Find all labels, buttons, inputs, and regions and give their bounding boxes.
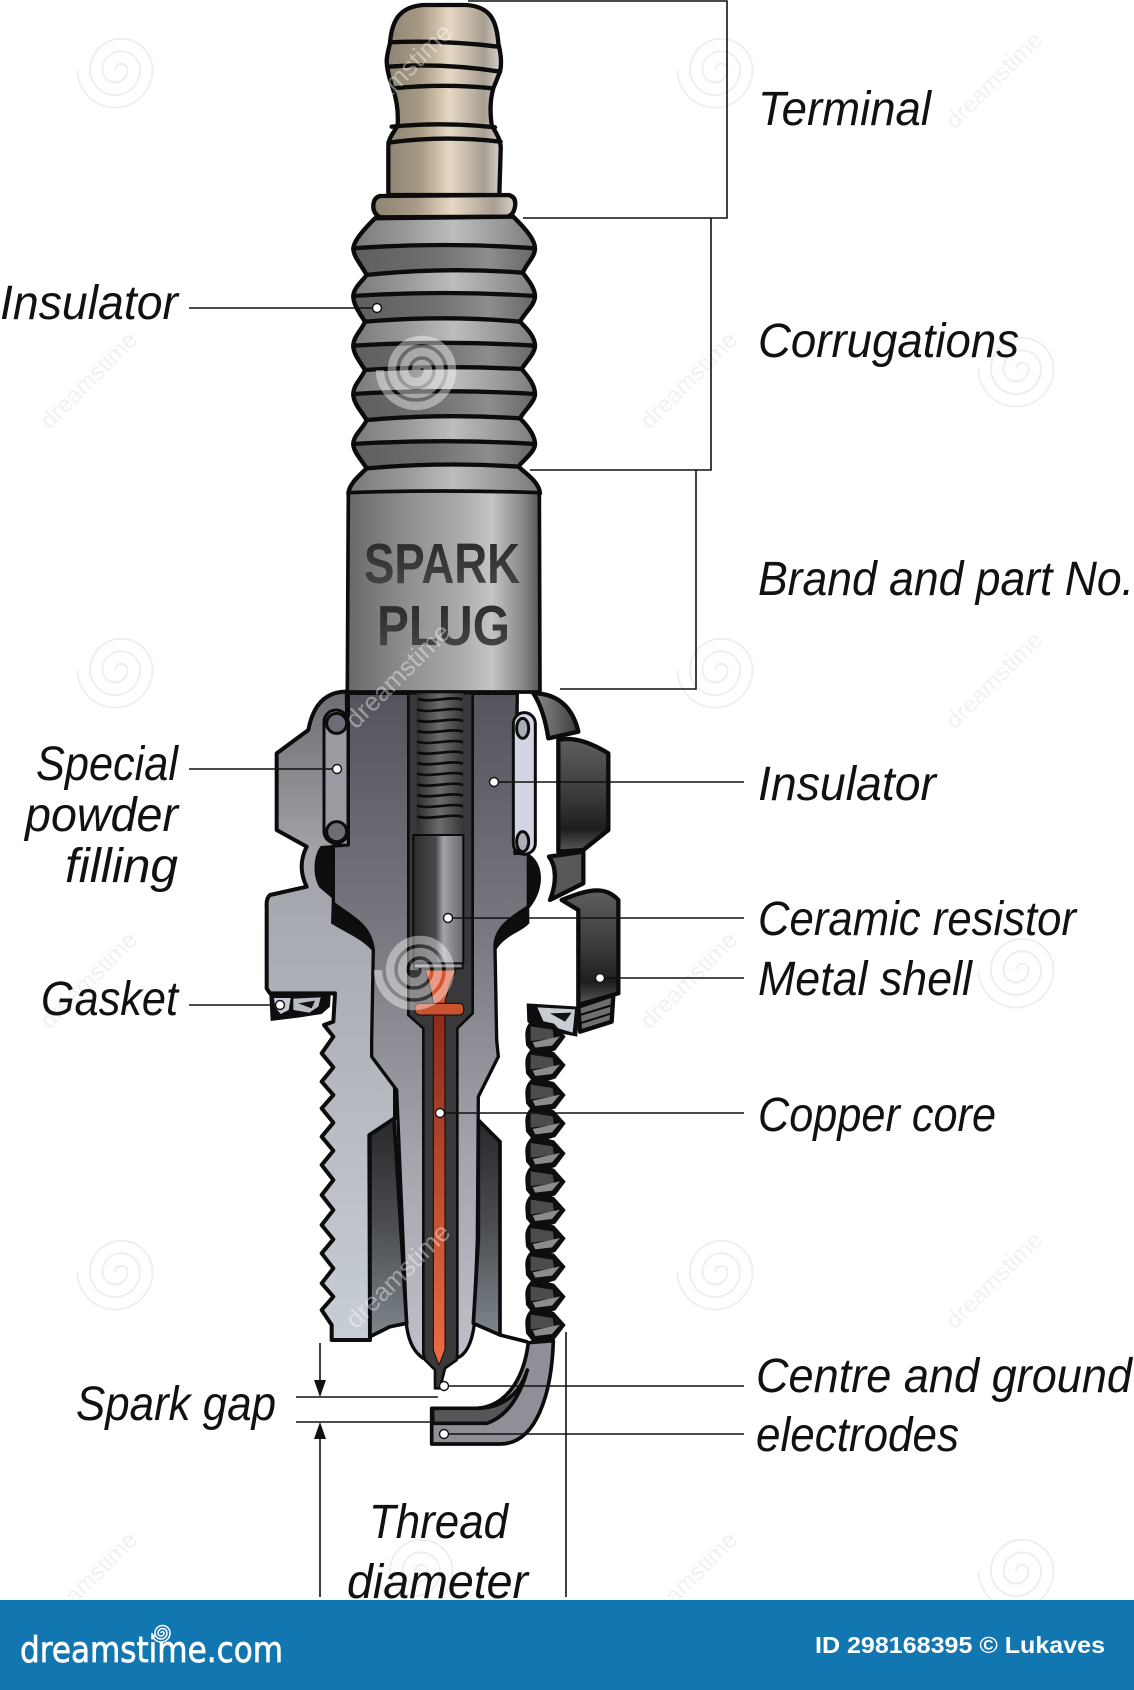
watermark spirals: dreamstime: [35, 1526, 143, 1634]
spark plug upper exterior: [347, 5, 540, 692]
labels right: electrodes: [756, 1409, 959, 1462]
footer id: ID 298168395 © Lukaves: [815, 1632, 1105, 1658]
crimp seals: [314, 845, 541, 953]
watermark spirals: dreamstime: [635, 326, 743, 434]
footer logo: dreamstime.com: [20, 1630, 283, 1671]
labels right: [756, 83, 1134, 1462]
corrugations: [348, 217, 540, 493]
labels left: Spark gap: [76, 1378, 276, 1431]
labels left: [0, 277, 530, 1609]
labels left: Gasket: [41, 973, 179, 1026]
ceramic resistor: [413, 835, 463, 968]
central bore: [408, 693, 473, 1388]
leader dots: [276, 304, 604, 1438]
labels left: Thread: [369, 1496, 509, 1549]
watermark marks on plug: dreamstime: [341, 17, 458, 134]
watermark marks on plug: dreamstime: [339, 617, 456, 734]
dark skirt: [370, 1118, 500, 1337]
gasket right: [527, 1003, 578, 1038]
thread right: [432, 1019, 566, 1444]
logo spiral: [152, 1626, 170, 1642]
spark gap and thread dimension lines: [296, 1332, 566, 1597]
spark plug cross-section: [267, 692, 618, 1444]
watermark spirals: dreamstime: [35, 926, 143, 1034]
labels right: Corrugations: [758, 315, 1019, 368]
labels right: Insulator: [758, 758, 938, 811]
watermark spirals: dreamstime: [940, 626, 1048, 734]
bracket: terminal: [468, 1, 727, 470]
watermark spirals: dreamstime: [635, 926, 743, 1034]
leader lines: [189, 308, 744, 1434]
labels left: powder: [23, 789, 180, 842]
brand text: PLUG: [377, 594, 510, 658]
bracket: brand and part number: [560, 470, 696, 689]
labels right: Copper core: [758, 1089, 996, 1142]
brand body: [347, 491, 540, 692]
brand text: SPARK: [364, 532, 520, 596]
ground electrode: [432, 1335, 553, 1444]
watermark marks on plug: dreamstime: [339, 1217, 456, 1334]
labels right: Metal shell: [758, 953, 973, 1006]
watermark spirals: dreamstime: [940, 1226, 1048, 1334]
copper core: [415, 970, 464, 1365]
labels left: Special: [36, 738, 179, 791]
labels left: Insulator: [0, 277, 180, 330]
powder chamber left: [324, 710, 348, 843]
terminal: [373, 5, 515, 217]
labels right: Terminal: [758, 83, 932, 136]
watermark marks on plug: [339, 17, 458, 1334]
watermark spirals: dreamstime: [635, 1526, 743, 1634]
brand text: [364, 532, 520, 658]
spring: [417, 693, 463, 835]
labels left: filling: [65, 840, 178, 893]
ceramic insulator section: [333, 693, 528, 1358]
powder chamber right: [513, 713, 535, 854]
labels left: diameter: [347, 1556, 530, 1609]
watermark spirals: dreamstime: [35, 326, 143, 434]
watermark spirals: dreamstime: [940, 26, 1048, 134]
bracket: corrugations: [530, 218, 711, 470]
metal shell left cut-away: [267, 692, 395, 1340]
metal shell right exterior: [533, 693, 618, 1032]
labels right: Ceramic resistor: [758, 893, 1078, 946]
gasket left: [269, 994, 331, 1021]
footer bar: [0, 1600, 1134, 1690]
